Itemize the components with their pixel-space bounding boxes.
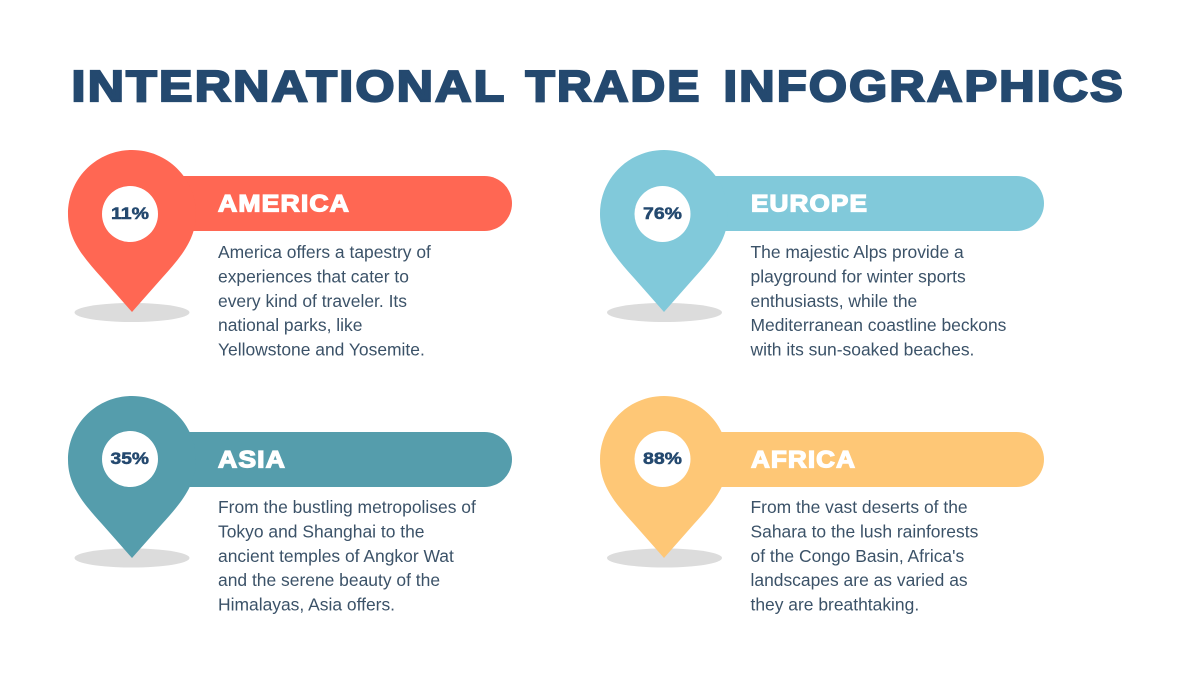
pin hole: Africa <box>634 431 690 487</box>
description: Asia: Tokyo and Shanghai to the <box>218 521 424 541</box>
description: Africa: they are breathtaking. <box>750 595 919 615</box>
title: INFOGRAPHICS <box>724 62 1125 111</box>
title <box>72 62 1125 111</box>
description: Asia: and the serene beauty of the <box>218 570 440 590</box>
percentage: Asia: 35% <box>110 450 149 468</box>
description: America: national parks, like <box>218 315 362 335</box>
title: TRADE <box>526 62 702 111</box>
description: Europe: The majestic Alps provide a <box>750 242 964 262</box>
panel: Europe <box>600 150 1044 360</box>
heading: Africa: AFRICA <box>751 446 856 474</box>
description: Africa: landscapes are as varied as <box>750 570 968 590</box>
pin hole: Europe <box>634 186 690 242</box>
description: America: Yellowstone and Yosemite. <box>218 340 425 360</box>
percentage: Europe: 76% <box>643 205 682 223</box>
description: Europe: enthusiasts, while the <box>750 291 917 311</box>
description: Africa: of the Congo Basin, Africa's <box>750 546 964 566</box>
description: Europe: with its sun-soaked beaches. <box>750 340 974 360</box>
pin hole: America <box>102 186 158 242</box>
pin hole: Asia <box>102 431 158 487</box>
map pin: Africa <box>600 396 728 558</box>
description: Europe: playground for winter sports <box>750 266 966 286</box>
pin shadow: America <box>74 303 190 322</box>
description: Europe: Mediterranean coastline beckons <box>750 315 1007 335</box>
pin shadow: Asia <box>74 548 190 568</box>
heading: Asia: ASIA <box>218 446 286 474</box>
map pin: Asia <box>68 396 196 558</box>
panel: America <box>68 150 512 360</box>
description: Africa: From the vast deserts of the <box>750 497 968 517</box>
description: America: America offers a tapestry of <box>218 242 431 262</box>
heading: Europe: EUROPE <box>751 190 868 218</box>
header bar: America <box>150 176 512 231</box>
percentage: America: 11% <box>111 205 149 223</box>
heading: America: AMERICA <box>218 190 350 218</box>
description: Asia: Himalayas, Asia offers. <box>218 595 395 615</box>
header bar: Africa <box>682 432 1044 487</box>
description: America: experiences that cater to <box>218 266 409 286</box>
pin shadow: Europe <box>607 303 722 322</box>
map pin: Europe <box>600 150 728 312</box>
header bar: Asia <box>150 432 512 487</box>
title: INTERNATIONAL <box>72 62 506 111</box>
header bar: Europe <box>682 176 1044 231</box>
percentage: Africa: 88% <box>643 450 682 468</box>
description: America: every kind of traveler. Its <box>218 291 407 311</box>
panel: Africa <box>600 396 1044 615</box>
pin shadow: Africa <box>607 548 722 568</box>
panel: Asia <box>68 396 512 615</box>
description: Africa: Sahara to the lush rainforests <box>750 521 979 541</box>
description: Asia: ancient temples of Angkor Wat <box>218 546 454 566</box>
map pin: America <box>68 150 196 312</box>
description: Asia: From the bustling metropolises of <box>218 497 476 517</box>
